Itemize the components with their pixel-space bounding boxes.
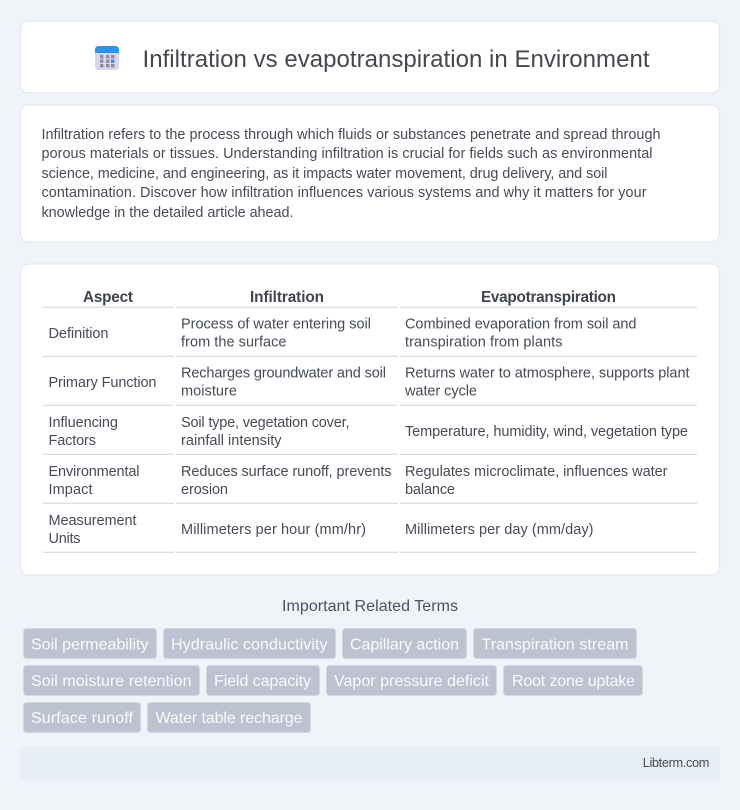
text block: introduction paragraph: knowledge in the detailed article ahead.: [42, 205, 294, 221]
tag list: related terms: [24, 628, 642, 732]
table row: definition: Definition: [48, 326, 108, 342]
table row: environmental impact: Regulates microclimate, influences water: [405, 464, 668, 480]
table row: environmental impact: Impact: [48, 482, 92, 498]
table header row: [43, 289, 697, 308]
table row: measurement units: [43, 513, 697, 553]
footer credit: Libterm.com: [643, 755, 709, 770]
table row: environmental impact: [43, 464, 697, 504]
table row: measurement units: Measurement: [48, 513, 136, 529]
table header row: Aspect: [83, 289, 133, 306]
footer bar: [20, 746, 720, 780]
table row: influencing factors: Temperature, humidity, wind, vegetation type: [405, 424, 688, 440]
table row: primary function: water cycle: [404, 384, 477, 400]
tag: transpiration stream: [474, 628, 636, 658]
table row: environmental impact: Environmental: [48, 464, 140, 480]
text block: introduction paragraph: porous materials or tissues. Understanding infiltration is crucial for fields such as environmental: [42, 146, 652, 162]
text block: introduction paragraph: contamination. Discover how infiltration influences various systems and why it matters for your: [42, 185, 647, 201]
text block: introduction paragraph: Infiltration refers to the process through which fluids or substances penetrate and spread through: [42, 127, 660, 143]
table row: definition: from the surface: [181, 334, 286, 350]
tag: root zone uptake: [504, 666, 642, 696]
table row: measurement units: Units: [48, 531, 80, 547]
panel: introduction: [20, 105, 720, 242]
table row: definition: [43, 316, 697, 357]
table header row: Evapotranspiration: [481, 289, 616, 306]
table row: primary function: Recharges groundwater and soil: [181, 366, 386, 382]
tag: vapor pressure deficit: [326, 666, 496, 696]
table header row: Infiltration: [250, 289, 324, 306]
title: Infiltration vs evapotranspiration in Environment: [142, 46, 650, 73]
table row: influencing factors: rainfall intensity: [181, 433, 282, 449]
table row: environmental impact: balance: [405, 482, 455, 498]
table row: primary function: [43, 366, 697, 406]
table row: influencing factors: Influencing: [48, 415, 118, 431]
icon: calendar grid: [95, 46, 119, 70]
tag: capillary action: Capillary action: [350, 636, 459, 653]
table row: primary function: Primary Function: [48, 375, 156, 391]
table row: definition: Process of water entering soil: [181, 316, 371, 332]
panel: header: [20, 21, 720, 93]
tag: soil moisture retention: Soil moisture retention: [31, 673, 192, 690]
tag: soil permeability: Soil permeability: [31, 636, 148, 653]
tag: hydraulic conductivity: Hydraulic conductivity: [171, 636, 328, 653]
text block: introduction paragraph: [42, 127, 660, 221]
tag: hydraulic conductivity: [164, 628, 336, 658]
tag: root zone uptake: Root zone uptake: [512, 673, 635, 690]
tag: field capacity: Field capacity: [214, 673, 311, 690]
tag: field capacity: [206, 666, 320, 696]
table row: measurement units: Millimeters per day (mm/day): [405, 522, 594, 538]
tag: vapor pressure deficit: Vapor pressure deficit: [334, 673, 490, 690]
table row: environmental impact: Reduces surface runoff, prevents: [181, 464, 392, 480]
tag: surface runoff: [24, 702, 140, 732]
table row: definition: transpiration from plants: [405, 334, 562, 350]
tag: transpiration stream: Transpiration stream: [482, 636, 628, 653]
table row: influencing factors: Factors: [48, 433, 96, 449]
tag: soil permeability: [24, 628, 156, 658]
tag: water table recharge: Water table recharge: [156, 710, 303, 727]
table row: definition: Combined evaporation from soil and: [405, 316, 636, 332]
table row: influencing factors: Soil type, vegetation cover,: [181, 415, 350, 431]
table row: primary function: moisture: [181, 384, 237, 400]
table row: influencing factors: [43, 415, 697, 455]
tag: water table recharge: [148, 702, 310, 732]
table row: environmental impact: erosion: [181, 482, 228, 498]
tag: soil moisture retention: [24, 666, 200, 696]
panel: comparison table: [20, 264, 720, 575]
table row: primary function: Returns water to atmosphere, supports plant: [405, 366, 690, 382]
tag: surface runoff: Surface runoff: [31, 710, 134, 727]
heading: important related terms: Important Related Terms: [282, 598, 458, 615]
text block: introduction paragraph: science, medicine, and engineering, as it impacts water movement, drug delivery, and soil: [42, 166, 608, 182]
tag: capillary action: [342, 628, 466, 658]
table row: measurement units: Millimeters per hour (mm/hr): [181, 522, 366, 538]
